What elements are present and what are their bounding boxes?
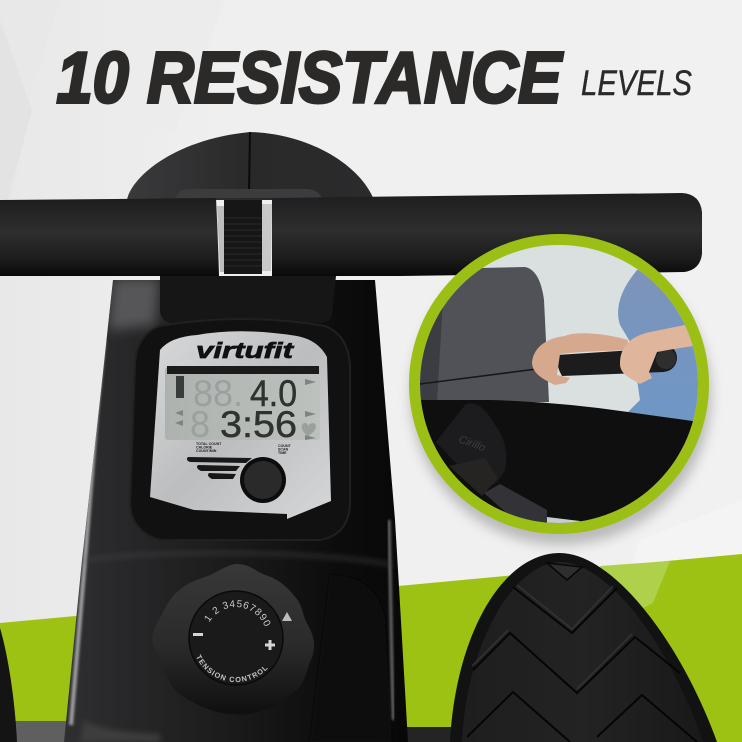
ring shadow [411,247,711,545]
dial label: TENSION CONTROL [196,654,268,682]
dial numbers: 1 2 34567890 [204,600,270,626]
inset photo [409,234,711,545]
small labels left: COUNT/MIN [196,449,217,453]
floor strips [14,721,455,742]
seat base [484,484,547,525]
seat back [437,267,549,402]
foot pedal [450,553,717,742]
minus mark [193,633,203,636]
small labels left: TOTAL COUNT [196,442,222,446]
arrow mark [282,612,292,621]
strap [224,200,262,274]
small labels right: SCAN [278,448,289,452]
silver faceplate [150,331,331,519]
blue shirt [618,265,700,422]
handle [557,348,664,376]
dome top [127,132,374,200]
virtufit logo: virtufit [196,338,295,363]
cable [420,366,560,384]
lower wall gap [547,517,580,523]
far arm and left hand [532,333,628,385]
sheer panel [449,458,498,496]
bottom row digits: 8 [190,404,210,445]
lcd display [165,366,320,445]
top row digits: 88. [193,373,243,414]
tension knob [154,564,314,714]
left bar grip [0,198,219,276]
knob dial [189,591,283,685]
wall [420,245,698,523]
body shell [64,280,408,742]
left foot pedal edge [0,628,17,742]
lcd display: 3:56 [220,404,297,445]
leggings brand: Cirillo [457,434,487,454]
rower body [64,276,408,742]
round button [240,457,286,503]
small labels left: CALORIE [196,446,213,450]
plus mark [265,640,275,650]
handle bar [0,193,702,276]
console surround [130,319,350,540]
title: 10 RESISTANCE [56,38,563,118]
small labels left [196,442,222,453]
lcd indicators [175,379,316,440]
lcd display: 4.0 [250,373,297,414]
notch [194,510,287,523]
green band [0,554,742,742]
small labels right [278,444,292,455]
subtitle: LEVELS [581,64,692,103]
small labels right: TIME [278,451,287,455]
centre block [160,276,336,323]
console panel [150,331,331,523]
knob grip [152,564,314,715]
tread chevrons [467,587,697,742]
silver bar core [217,206,224,272]
button speed bars [187,457,252,479]
near arm and right hand [620,324,693,384]
green ring [409,234,709,534]
legs [415,400,700,530]
knee [436,404,506,490]
right bar grip [272,193,702,276]
small labels right: COUNT [278,444,292,448]
